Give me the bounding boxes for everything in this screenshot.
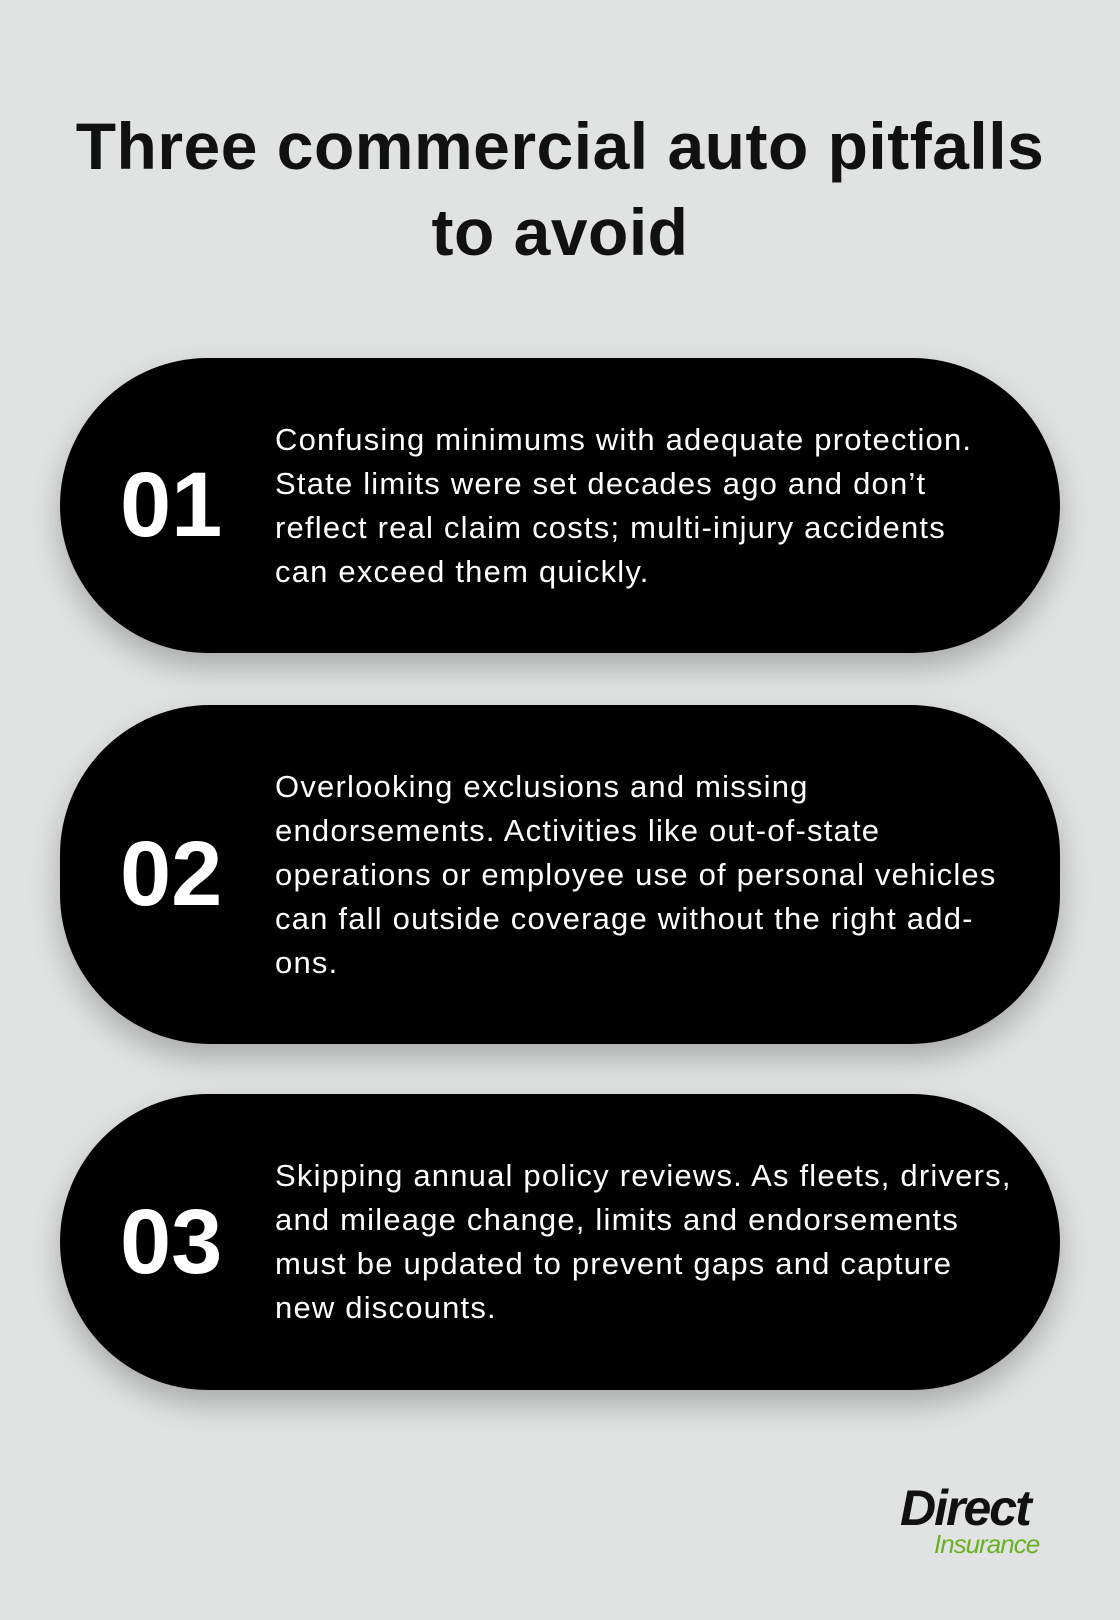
logo: Direct Insurance	[900, 1480, 1040, 1559]
panel: pitfall 01	[60, 358, 1060, 653]
text block 03: Skipping annual policy reviews. As fleets, drivers,	[275, 1158, 1012, 1193]
text block 03: must be updated to prevent gaps and capture	[275, 1246, 952, 1281]
number 01: 01	[120, 454, 222, 556]
text block 01: State limits were set decades ago and don’t	[275, 466, 926, 500]
text block 02: ons.	[275, 944, 338, 980]
panel: pitfall 02	[60, 705, 1060, 1044]
text block 02: can fall outside coverage without the right add-	[275, 900, 974, 936]
text block 03	[275, 1158, 1012, 1325]
title: to avoid	[431, 195, 688, 269]
text block 02	[275, 768, 997, 980]
title	[76, 109, 1044, 269]
text block 01	[275, 422, 972, 588]
text block 02: Overlooking exclusions and missing	[275, 768, 809, 804]
title: Three commercial auto pitfalls	[76, 109, 1044, 183]
logo: Direct Insurance: Insurance	[934, 1529, 1039, 1559]
text block 01: Confusing minimums with adequate protection.	[275, 422, 972, 456]
text block 02: endorsements. Activities like out-of-state	[275, 812, 880, 848]
panel: pitfall 03	[60, 1094, 1060, 1390]
text block 03: and mileage change, limits and endorsements	[275, 1202, 959, 1237]
text block 02: operations or employee use of personal vehicles	[275, 856, 997, 892]
number 02: 02	[120, 823, 222, 925]
text block 01: reflect real claim costs; multi-injury accidents	[275, 510, 946, 544]
text block 03: new discounts.	[275, 1290, 497, 1325]
logo: Direct Insurance: Direct	[900, 1480, 1030, 1536]
text block 01: can exceed them quickly.	[275, 554, 650, 588]
number 03: 03	[120, 1190, 222, 1292]
